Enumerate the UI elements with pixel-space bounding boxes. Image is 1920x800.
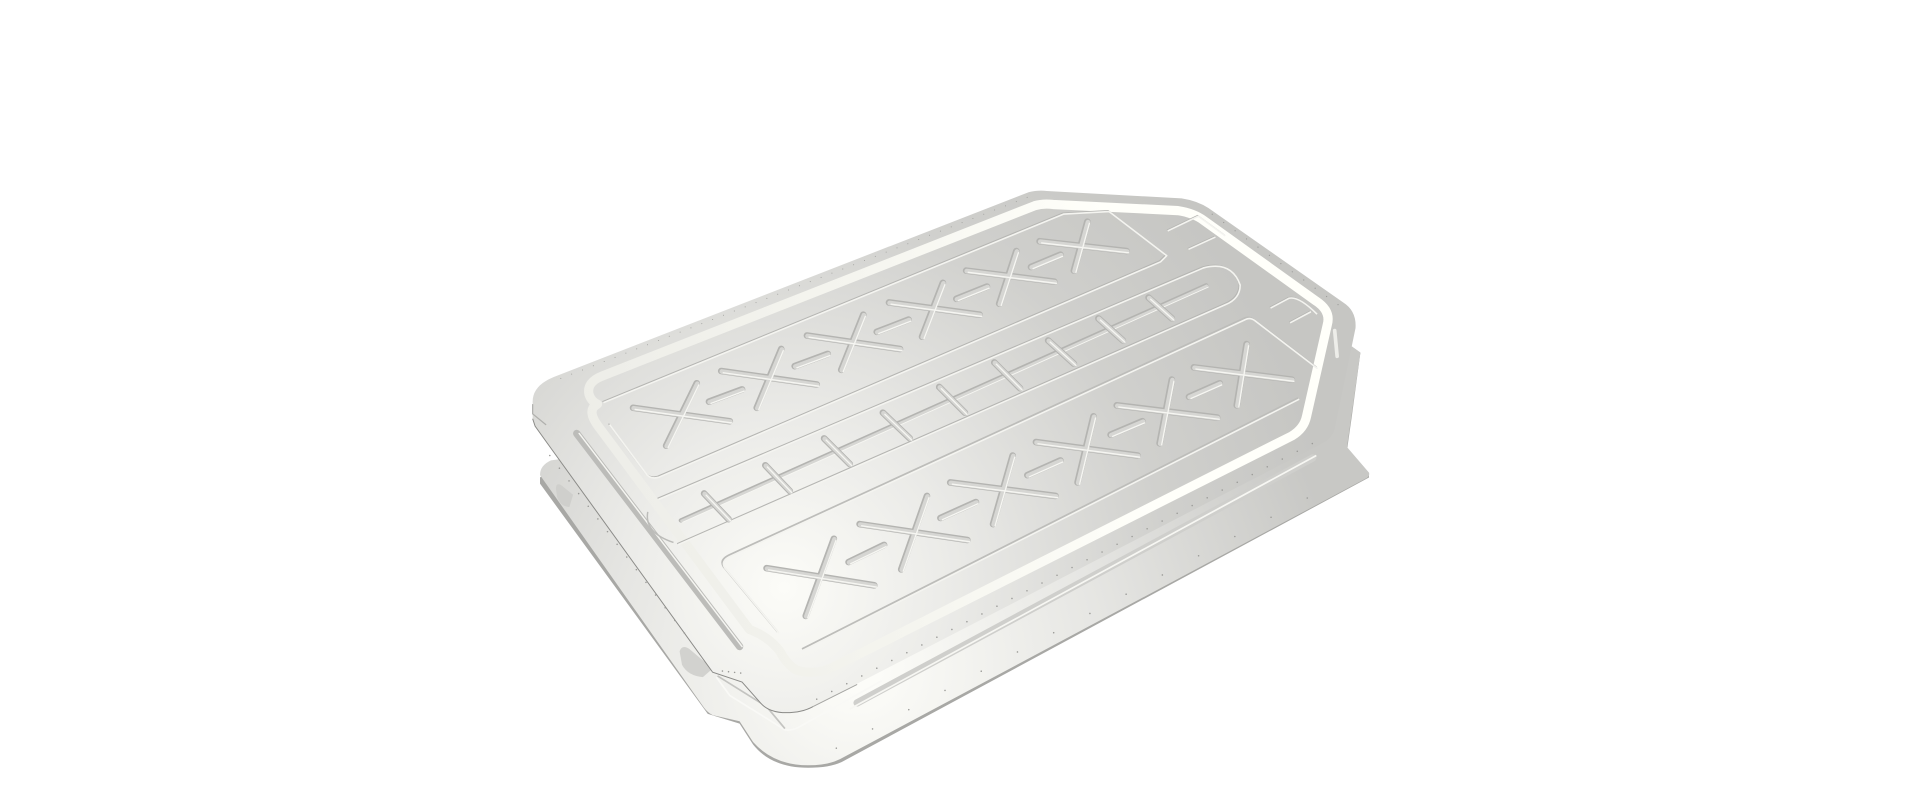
upper row cross 5 [966,251,1056,305]
recessed channel: middle [658,265,1240,545]
middle channel rib [681,285,1208,522]
lower row cross 1 [767,539,876,618]
plate edge rivets [550,196,1338,699]
lower row cross 3 [950,456,1058,526]
lower row cross 4 [1036,416,1140,484]
corner tab [680,647,713,677]
left long groove [577,433,742,647]
recessed panel: upper [602,211,1167,478]
upper row cross 3 [807,315,902,372]
recessed panel: lower [722,317,1318,650]
corner small grooves [1167,216,1337,356]
upper row cross 4 [889,283,982,338]
middle channel ticks [704,298,1174,521]
lower row dashes [849,383,1222,564]
upper row cross 2 [721,349,819,409]
lower row cross 2 [860,496,969,571]
bottom plate long groove [716,456,1316,730]
upper row cross 6 [1040,222,1129,272]
bottom plate [540,347,1369,768]
lower row cross 5 [1117,380,1219,445]
raised perimeter rim [589,204,1328,672]
main plate body [533,191,1356,713]
upper row dashes [709,255,1062,403]
lower row cross 6 [1194,344,1294,407]
upper row cross 1 [633,383,732,447]
left tab [556,484,573,507]
bottom plate rivets [836,487,1327,748]
